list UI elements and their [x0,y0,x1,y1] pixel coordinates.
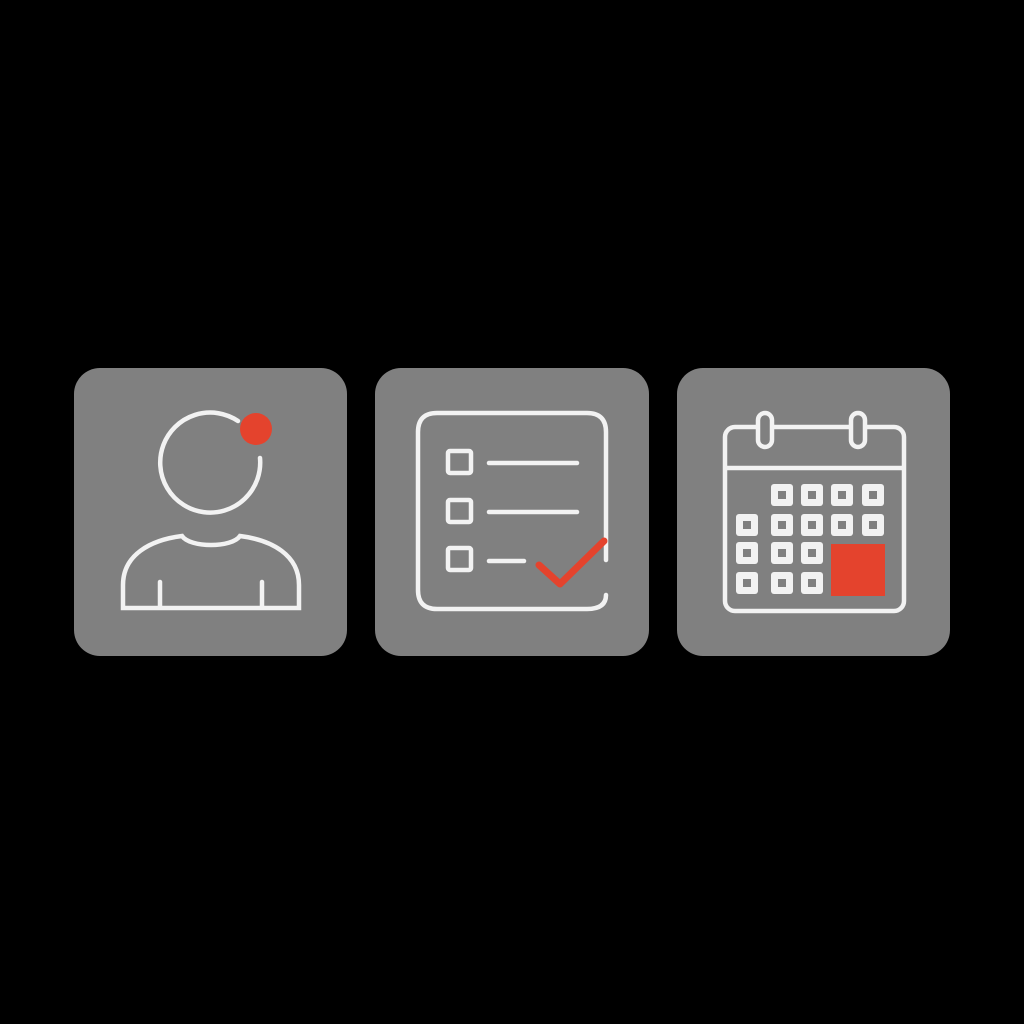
panel: person icon tile [74,368,347,656]
panel: calendar icon tile [677,368,950,656]
panel: checklist icon tile [375,368,649,656]
icon: red highlighted day [831,544,885,596]
icon: calendar [725,413,904,611]
icon: red check mark [539,541,604,584]
icon: person [123,413,299,608]
calendar day grid [736,484,884,594]
icon: checklist [418,413,606,609]
icon: red notification dot [240,413,272,445]
